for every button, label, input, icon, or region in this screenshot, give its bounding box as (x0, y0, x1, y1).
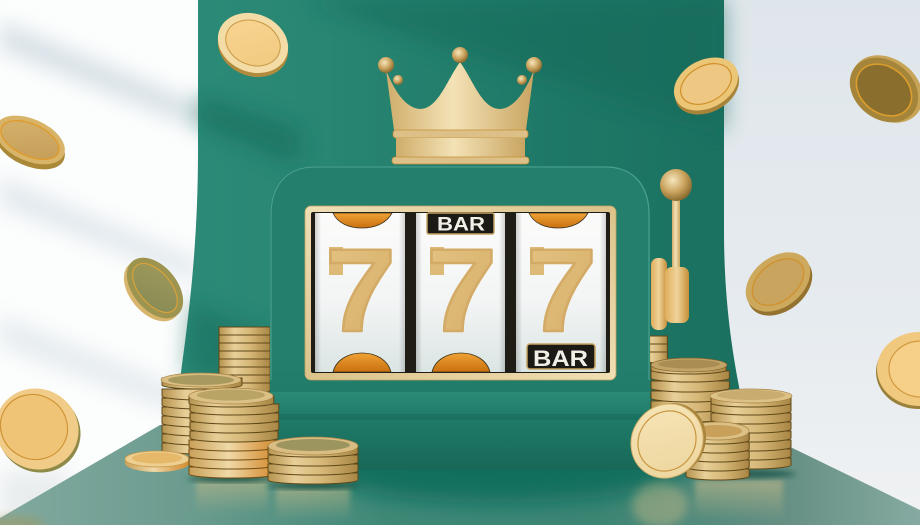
BAR symbol top: BAR (437, 214, 485, 236)
reel 2: 7 (426, 225, 497, 357)
reel 3: 7 (526, 225, 597, 357)
coins stack: front (268, 437, 358, 484)
reel 1: 7 (325, 225, 396, 357)
floating coin: top right (665, 47, 748, 125)
floating coin: right middle (734, 240, 824, 328)
floor reflections (0, 427, 796, 525)
coins stack: right front (685, 422, 749, 480)
coins stack: right back (651, 358, 729, 422)
reel 2 (416, 213, 505, 372)
reel 3 (516, 213, 606, 372)
coins stack: back left (219, 327, 270, 394)
lever (651, 169, 692, 330)
right wall (720, 0, 920, 525)
loose flat coin (125, 451, 189, 472)
reel 1 (315, 213, 405, 372)
left wall (0, 0, 200, 525)
floating coin: far right bottom (876, 332, 920, 409)
floating coin: upper left (0, 106, 72, 179)
BAR symbol bottom: BAR (533, 346, 588, 371)
floating coin: top (209, 3, 297, 87)
BAR symbol top (427, 213, 494, 236)
floating coin: far right top (837, 41, 920, 137)
coins stack: centre (189, 388, 279, 478)
coins stack: left (161, 373, 242, 454)
coins stack: back right (645, 336, 667, 363)
curtain shadows (185, 0, 724, 400)
crown (378, 47, 542, 164)
floating coin: mid left (113, 247, 194, 332)
reel window (305, 206, 616, 380)
machine body (270, 166, 650, 470)
BAR symbol bottom (527, 344, 595, 371)
front leaning coin (617, 389, 720, 492)
green backdrop curtain (180, 0, 740, 440)
floating coin: lower left (0, 373, 95, 488)
coins stack: right (710, 389, 792, 469)
floor (0, 425, 920, 525)
